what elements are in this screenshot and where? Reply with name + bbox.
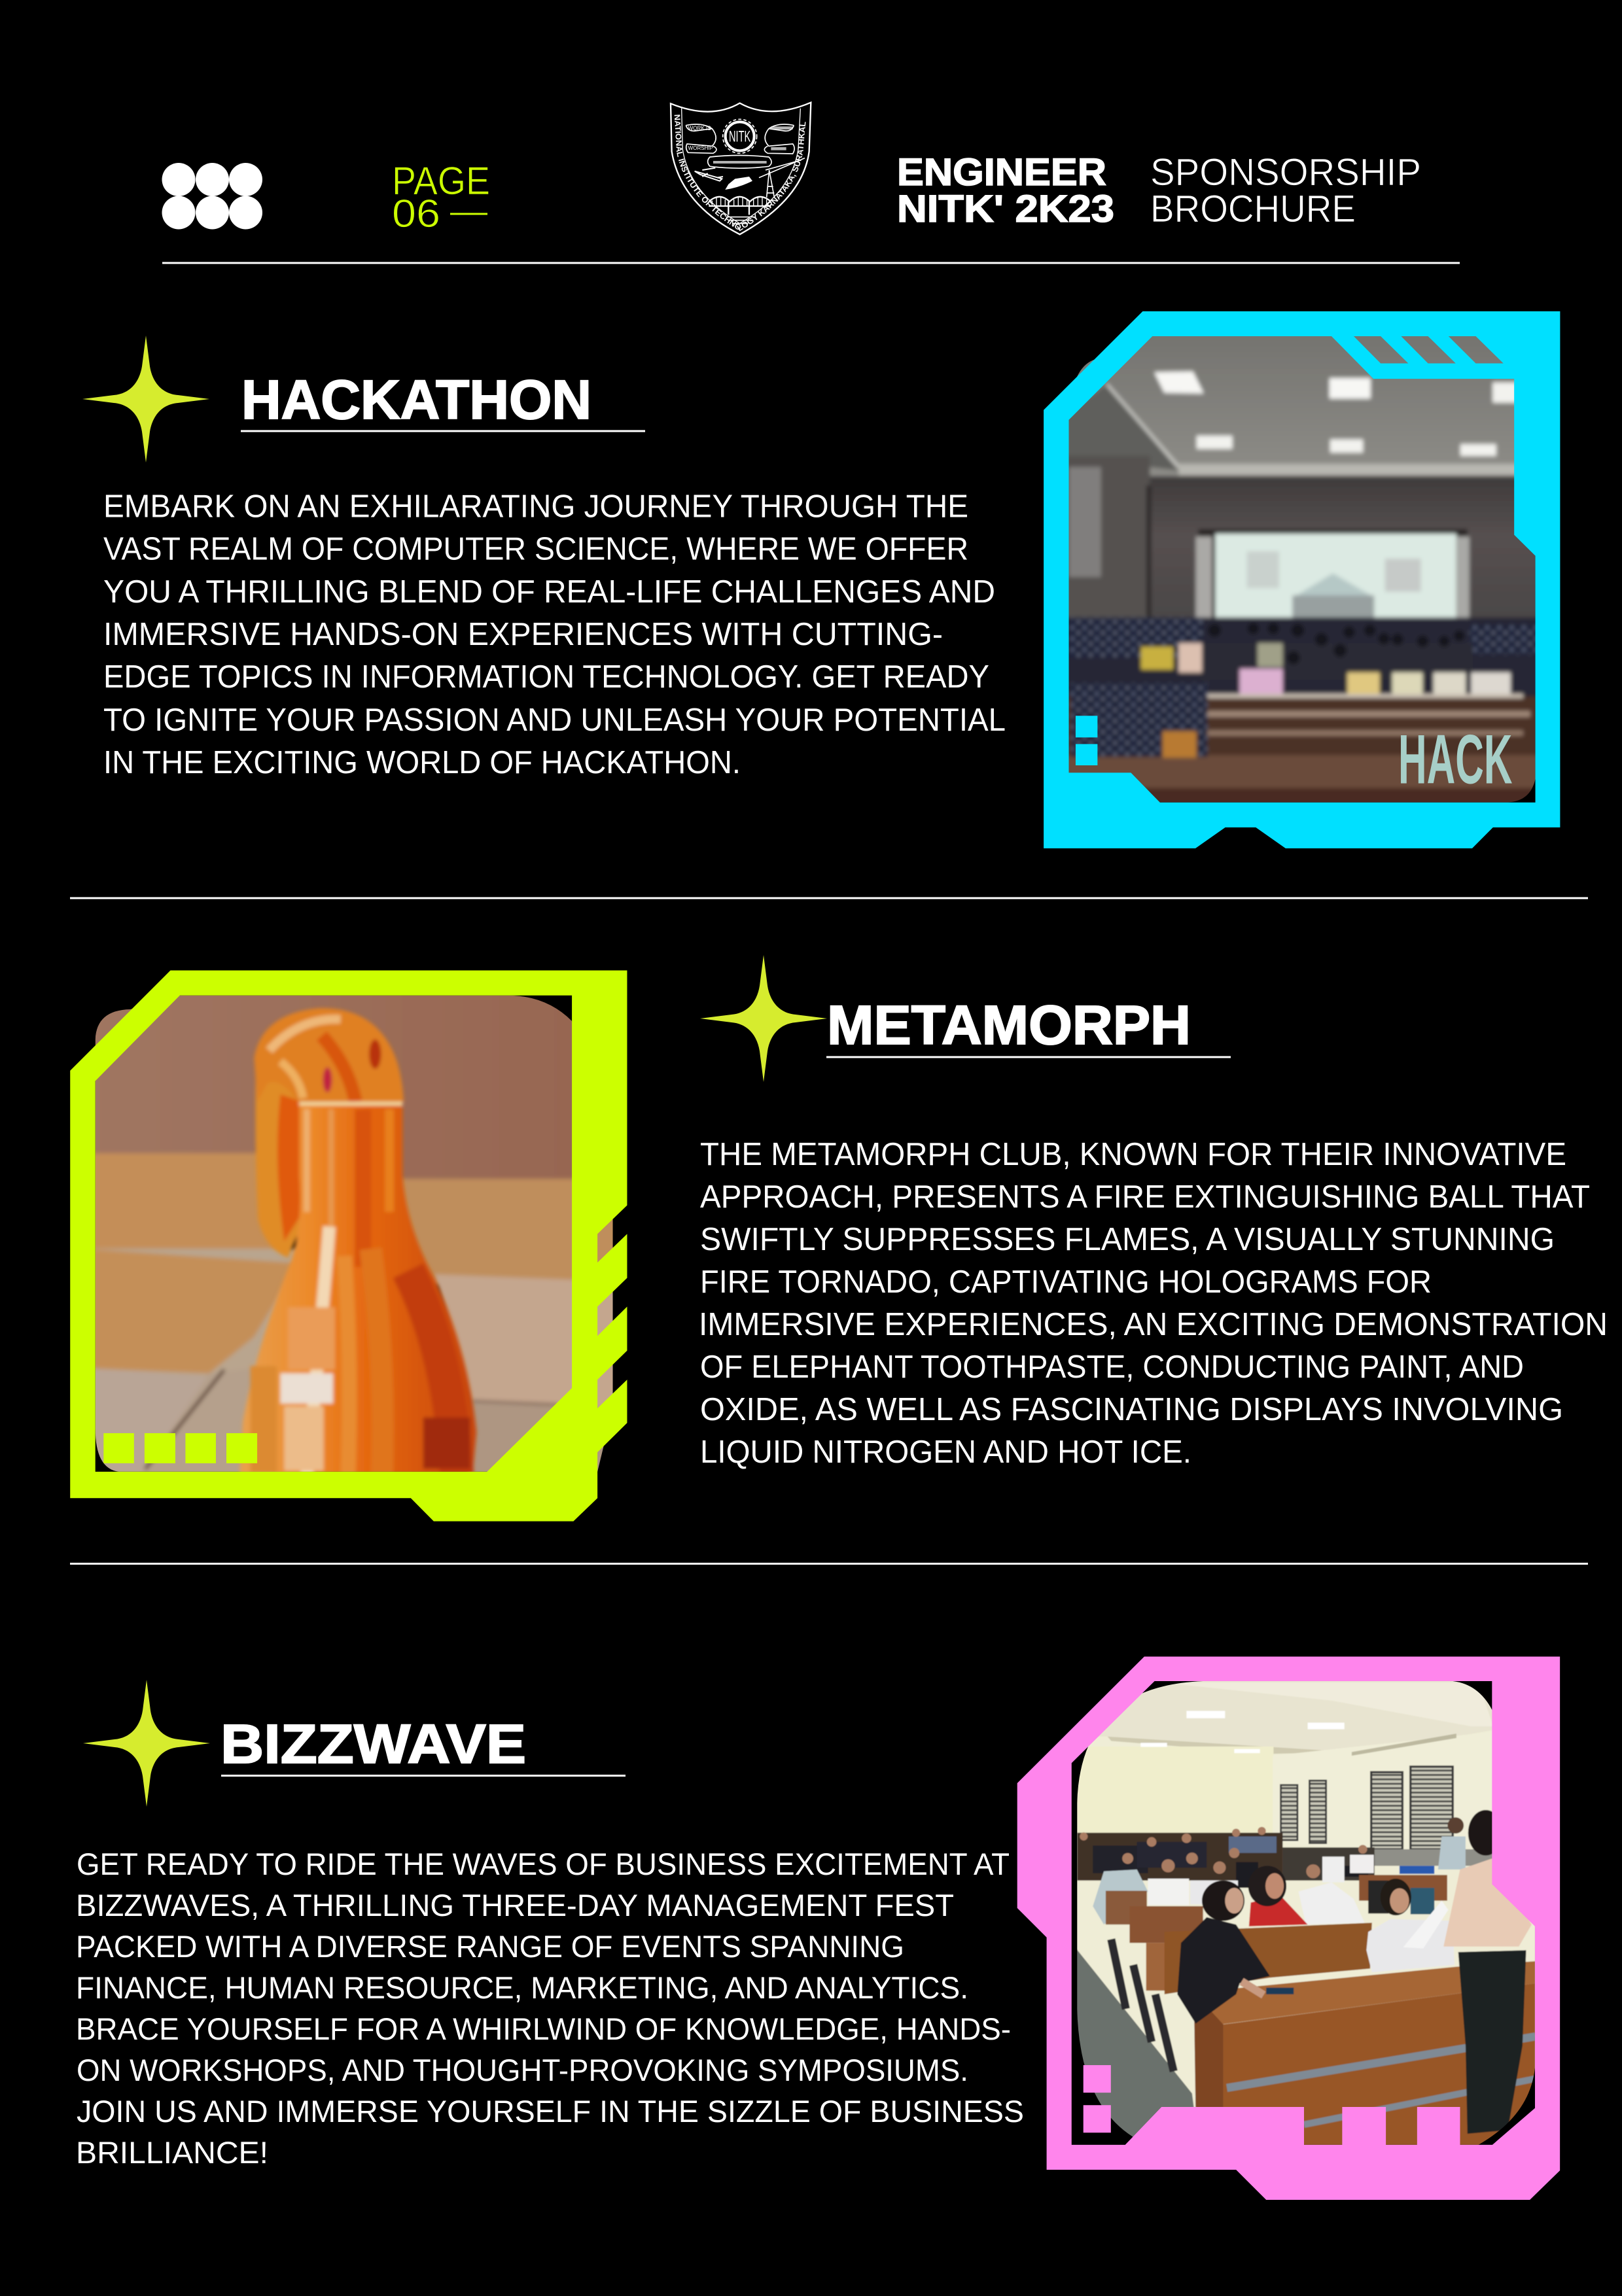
squares: lime [103, 1433, 257, 1463]
heading: hackathon: HACKATHON [241, 369, 591, 430]
event title: NITK' 2K23 [897, 188, 1114, 230]
logo: NITK crest: NATIONAL INSTITUTE OF TECHNOLOGY KARNATAKA, SURATHKAL [674, 114, 806, 232]
heading: bizzwave: BIZZWAVE [220, 1713, 526, 1775]
text block: bizzwave: BRACE YOURSELF FOR A WHIRLWIND OF KNOWLEDGE, HANDS- [76, 2011, 1011, 2046]
frame: pink [1017, 1656, 1560, 2200]
text block: bizzwave: JOIN US AND IMMERSE YOURSELF IN THE SIZZLE OF BUSINESS [77, 2094, 1024, 2129]
text block: hackathon: IMMERSIVE HANDS-ON EXPERIENCES WITH CUTTING- [103, 617, 943, 652]
photo sign lettering: HACK [1398, 721, 1512, 799]
logo: NITK crest: WORK IS [688, 125, 711, 131]
event title [897, 151, 1114, 230]
icon: star [83, 1680, 210, 1807]
panel: bizzwave [76, 1656, 1560, 2200]
framed photo: hackathon [1044, 311, 1560, 848]
text block: bizzwave: ON WORKSHOPS, AND THOUGHT-PROVOKING SYMPOSIUMS. [77, 2053, 968, 2087]
text block: bizzwave: BIZZWAVES, A THRILLING THREE-DAY MANAGEMENT FEST [76, 1888, 954, 1922]
heading: bizzwave [220, 1713, 626, 1777]
icon: six white dots [162, 163, 262, 229]
photo: classroom [1074, 1679, 1537, 2148]
icon: star [82, 336, 209, 462]
text block: bizzwave: BRILLIANCE! [76, 2135, 268, 2170]
text block: metamorph: THE METAMORPH CLUB, KNOWN FOR THEIR INNOVATIVE [700, 1137, 1566, 1172]
icon: star [700, 955, 827, 1082]
panel: hackathon [82, 311, 1560, 848]
frame: cyan [1044, 311, 1560, 848]
text block: metamorph: APPROACH, PRESENTS A FIRE EXTINGUISHING BALL THAT [700, 1179, 1590, 1215]
framed photo: bizzwave [1017, 1656, 1560, 2200]
text block: bizzwave: FINANCE, HUMAN RESOURCE, MARKETING, AND ANALYTICS. [76, 1970, 968, 2005]
page number: PAGE [392, 159, 490, 203]
squares: pink [1084, 2065, 1111, 2132]
photo: audience in auditorium [1057, 331, 1545, 807]
panel: metamorph [70, 955, 1608, 1522]
page number [392, 159, 490, 235]
text block: hackathon: EDGE TOPICS IN INFORMATION TECHNOLOGY. GET READY [103, 659, 989, 695]
squares: cyan [1076, 716, 1097, 765]
brochure title: SPONSORSHIP [1150, 151, 1421, 194]
page number: 06 [392, 192, 440, 235]
event title: ENGINEER [897, 151, 1106, 194]
text block: hackathon [103, 489, 1006, 780]
text block: bizzwave: PACKED WITH A DIVERSE RANGE OF EVENTS SPANNING [76, 1929, 904, 1964]
text block: metamorph: LIQUID NITROGEN AND HOT ICE. [700, 1435, 1191, 1470]
frame: lime [70, 971, 627, 1522]
text block: metamorph: FIRE TORNADO, CAPTIVATING HOLOGRAMS FOR [700, 1264, 1432, 1300]
text block: bizzwave: GET READY TO RIDE THE WAVES OF BUSINESS EXCITEMENT AT [77, 1847, 1010, 1881]
text block: metamorph: IMMERSIVE EXPERIENCES, AN EXCITING DEMONSTRATION [699, 1307, 1608, 1342]
text block: metamorph: OF ELEPHANT TOOTHPASTE, CONDUCTING PAINT, AND [700, 1349, 1524, 1385]
logo: NITK crest: WORSHIP [688, 145, 713, 151]
text block: metamorph: SWIFTLY SUPPRESSES FLAMES, A VISUALLY STUNNING [700, 1222, 1555, 1257]
heading: metamorph: METAMORPH [827, 994, 1191, 1056]
text block: hackathon: EMBARK ON AN EXHILARATING JOURNEY THROUGH THE [103, 489, 968, 525]
logo: NITK crest: NITK [729, 128, 750, 146]
text block: bizzwave [76, 1847, 1024, 2170]
text block: hackathon: VAST REALM OF COMPUTER SCIENCE, WHERE WE OFFER [103, 531, 968, 566]
photo: elephant toothpaste flask [81, 988, 626, 1484]
text block: hackathon: YOU A THRILLING BLEND OF REAL-LIFE CHALLENGES AND [103, 574, 995, 610]
text block: metamorph: OXIDE, AS WELL AS FASCINATING DISPLAYS INVOLVING [700, 1392, 1563, 1427]
brochure title [1150, 151, 1421, 230]
brochure title: BROCHURE [1150, 188, 1356, 230]
text block: hackathon: TO IGNITE YOUR PASSION AND UNLEASH YOUR POTENTIAL [103, 703, 1006, 738]
text block: hackathon: IN THE EXCITING WORLD OF HACKATHON. [103, 745, 741, 780]
text block: metamorph [699, 1137, 1608, 1470]
framed photo: metamorph [70, 971, 627, 1522]
header [162, 101, 1421, 235]
